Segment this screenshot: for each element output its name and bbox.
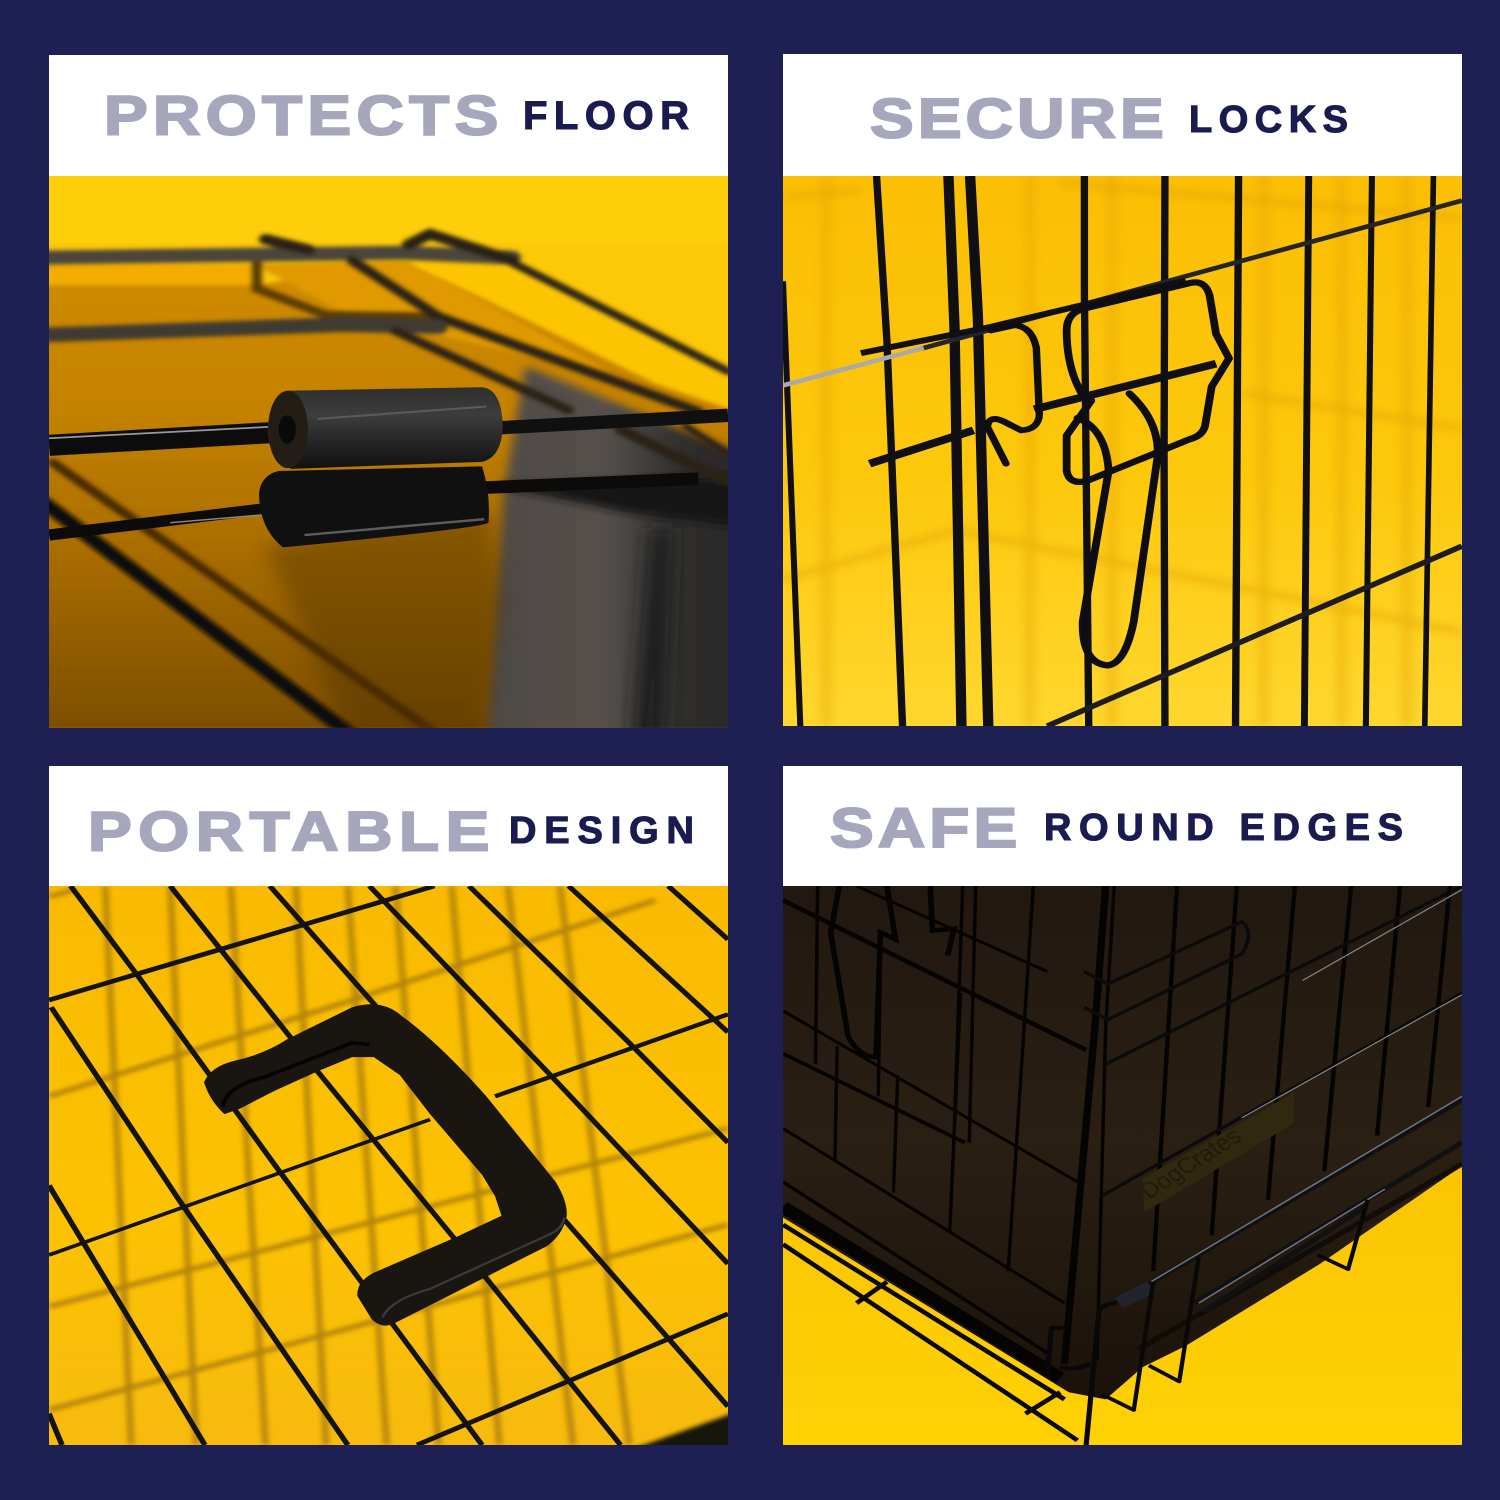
panel: safe round edges bbox=[783, 766, 1462, 1445]
header: secure locks bbox=[783, 54, 1462, 176]
corner rod bbox=[1119, 1287, 1151, 1303]
crate body bbox=[783, 886, 1462, 1399]
right face rails bbox=[1084, 886, 1462, 1196]
wires bbox=[783, 176, 1462, 726]
blurred shadows bbox=[49, 886, 728, 1445]
header: safe round edges: ROUND EDGES bbox=[1044, 807, 1403, 849]
grid wires bbox=[49, 886, 728, 1445]
header: protects floor: PROTECTS bbox=[104, 84, 498, 146]
photo: rubber floor protector on crate wire bbox=[36, 176, 751, 746]
header: safe round edges: SAFE bbox=[830, 796, 1017, 859]
door latches bbox=[831, 886, 954, 1057]
wire feet and floor grid bbox=[783, 1200, 1368, 1445]
left face wires bbox=[783, 886, 1114, 1364]
wire bbox=[49, 432, 279, 445]
header: secure locks: SECURE bbox=[870, 87, 1164, 149]
panel: protects floor bbox=[36, 55, 751, 746]
blurred wires bbox=[40, 234, 728, 736]
base shadow bbox=[783, 1207, 1060, 1378]
header: portable design bbox=[49, 766, 728, 886]
panel: secure locks bbox=[783, 54, 1462, 726]
header: safe round edges bbox=[783, 766, 1462, 886]
cylinder reflection bbox=[259, 466, 489, 547]
header: protects floor: FLOOR bbox=[523, 94, 689, 138]
panel: portable design bbox=[49, 766, 742, 1456]
header: secure locks: LOCKS bbox=[1189, 99, 1348, 141]
grey crate wall bbox=[482, 362, 728, 728]
icon: black handle bbox=[204, 1004, 567, 1326]
logo plate: DogCrates bbox=[1134, 1123, 1248, 1204]
photo: crate corner bbox=[783, 886, 1462, 1445]
icon: hook bbox=[987, 325, 1039, 464]
icon: latch bbox=[1067, 282, 1229, 665]
logo plate bbox=[1134, 1093, 1294, 1212]
header: protects floor bbox=[49, 55, 728, 176]
amber surface bbox=[36, 260, 742, 739]
header: portable design: PORTABLE bbox=[88, 800, 489, 862]
icon: rubber cylinder bbox=[268, 387, 503, 469]
photo: door latch bbox=[783, 176, 1462, 726]
photo: carry handle bbox=[49, 886, 742, 1456]
header: portable design: DESIGN bbox=[509, 810, 694, 852]
blurred shadows bbox=[783, 176, 1462, 726]
right face bars bbox=[1153, 886, 1450, 1271]
wire reflection bbox=[49, 479, 699, 535]
